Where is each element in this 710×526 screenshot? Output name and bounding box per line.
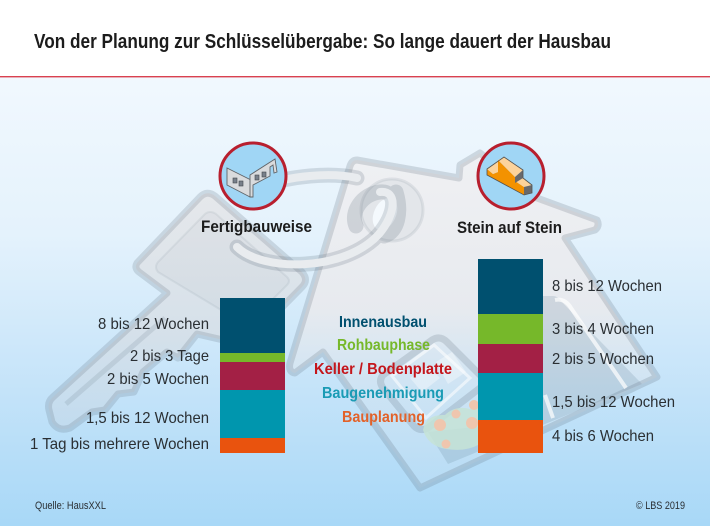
- background illustration: key and house tag: [48, 153, 657, 488]
- header rule: [0, 76, 710, 77]
- legend: Baugenehmigung: [322, 385, 444, 402]
- tree: [423, 400, 490, 450]
- tag hole: [361, 179, 423, 241]
- duration labels: 1 Tag bis mehrere Wochen: [30, 436, 209, 453]
- stacked bar: [478, 259, 543, 453]
- key ring: [237, 175, 399, 264]
- duration labels: [552, 278, 675, 445]
- heading: Stein auf Stein: [457, 218, 562, 237]
- stacked bar: [220, 298, 285, 453]
- legend: Keller / Bodenplatte: [314, 361, 452, 378]
- legend: Rohbauphase: [337, 337, 430, 354]
- legend: [314, 314, 452, 426]
- copyright: © LBS 2019: [636, 500, 685, 512]
- duration labels: 2 bis 5 Wochen: [107, 371, 209, 388]
- duration labels: 1,5 bis 12 Wochen: [552, 394, 675, 411]
- duration labels: 3 bis 4 Wochen: [552, 321, 654, 338]
- house tag silhouette: [290, 153, 657, 488]
- source note: Quelle: HausXXL: [35, 500, 106, 512]
- heading: Fertigbauweise: [201, 217, 312, 236]
- duration labels: 2 bis 5 Wochen: [552, 351, 654, 368]
- panel: Stein auf Stein: [457, 143, 675, 453]
- legend: Bauplanung: [342, 409, 425, 426]
- duration labels: 1,5 bis 12 Wochen: [86, 410, 209, 427]
- duration labels: 8 bis 12 Wochen: [98, 316, 209, 333]
- duration labels: 8 bis 12 Wochen: [552, 278, 662, 295]
- duration labels: [30, 316, 209, 453]
- duration labels: 4 bis 6 Wochen: [552, 428, 654, 445]
- key silhouette: [48, 193, 306, 429]
- title: Von der Planung zur Schlüsselübergabe: So lange dauert der Hausbau: [34, 31, 611, 53]
- duration labels: 2 bis 3 Tage: [130, 348, 209, 365]
- icon: stone blocks: [478, 143, 544, 209]
- icon: prefabricated walls: [220, 143, 286, 209]
- panel: Fertigbauweise: [30, 143, 312, 453]
- legend: Innenausbau: [339, 314, 427, 331]
